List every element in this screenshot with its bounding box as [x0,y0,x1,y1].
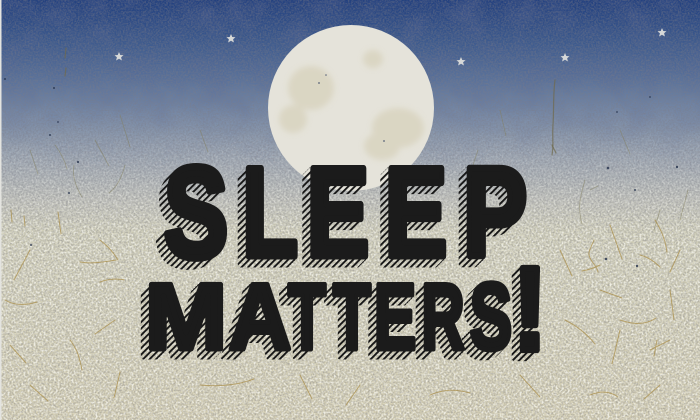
title: MATTERS! [145,242,547,376]
icon: moon [268,25,434,191]
title: SLEEP: P [463,141,527,283]
title: MATTERS!: E [374,265,416,370]
dark fibres in the sky [65,48,556,155]
moon specks [318,74,385,142]
title: MATTERS!: ! [513,242,547,376]
title: SLEEP: E [307,141,369,283]
title: MATTERS!: S [470,265,512,370]
title: MATTERS!: T [288,264,326,369]
stars [114,28,666,66]
title: MATTERS!: R [421,264,465,369]
pale fibres in the transition band [30,110,688,230]
title: SLEEP: E [385,141,447,283]
title: MATTERS!: M [145,265,227,369]
moon craters [279,50,424,160]
title: SLEEP [164,141,527,285]
title: MATTERS!: T [333,264,371,369]
title: SLEEP: L [242,142,298,284]
hatched shadow: SLEEP [156,166,514,270]
dark paper specks [4,78,678,267]
title: MATTERS!: A [229,265,291,370]
title: SLEEP: S [164,141,228,285]
golden fibres on the sand [5,210,680,405]
hatched shadow: MATTERS! [140,267,538,362]
